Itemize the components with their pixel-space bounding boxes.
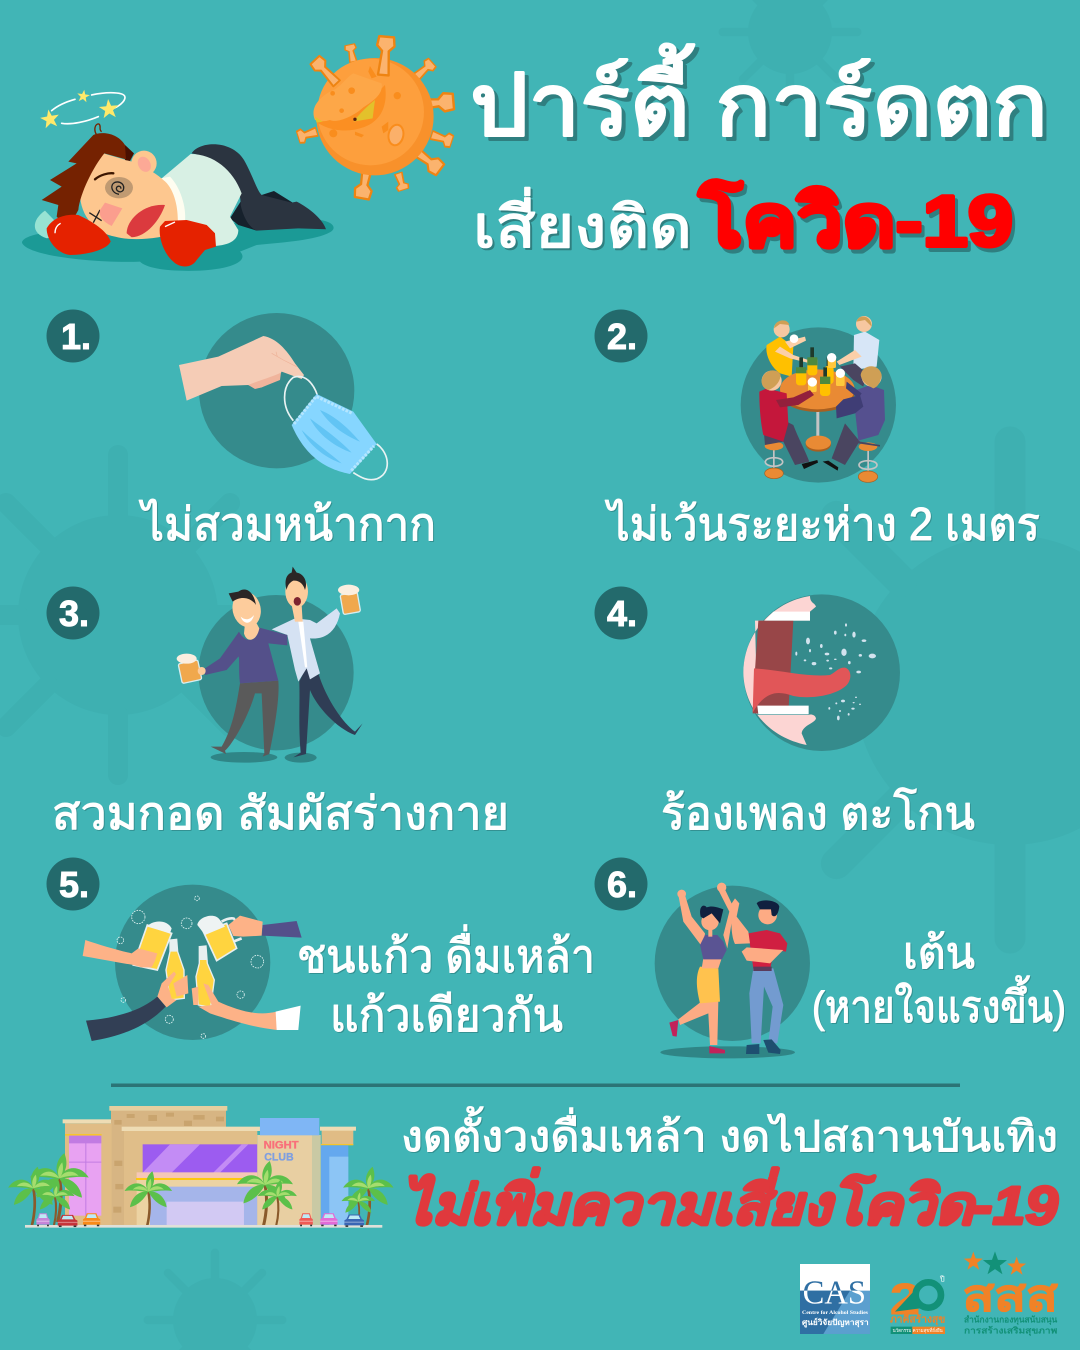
front-right man — [823, 366, 885, 471]
cars — [36, 1213, 364, 1227]
caption 6: เต้น — [903, 929, 975, 978]
head — [80, 153, 178, 239]
arm left — [83, 940, 157, 967]
floor shadow — [22, 220, 334, 271]
number badge 5 — [46, 858, 100, 910]
number badge 1: 1. — [61, 316, 91, 357]
circle and drunk men illustration — [177, 567, 363, 763]
caption 5: ชนแก้ว ดื่มเหล้า — [297, 924, 595, 982]
caption 6 — [812, 929, 1066, 1032]
number badge 4 — [594, 586, 648, 640]
logo: 20 years: ปี — [939, 1275, 945, 1284]
neon sign text: NIGHT — [264, 1140, 299, 1152]
logo: ThaiHealth — [963, 1251, 1058, 1336]
item 3: hugging — [46, 567, 509, 839]
hand bottom right — [192, 983, 277, 1030]
front-left man — [759, 370, 818, 469]
logo: CAS — [800, 1264, 870, 1334]
logos — [800, 1251, 1058, 1336]
beer glass left — [133, 925, 172, 970]
bottles and glasses — [796, 347, 845, 396]
dizzy face — [89, 173, 165, 237]
caption 5 — [297, 924, 595, 1041]
caption 1: ไม่สวมหน้ากาก — [138, 498, 436, 550]
number badge 1 — [46, 310, 100, 362]
item 4: singing and shouting — [594, 586, 975, 839]
orange virus — [296, 36, 454, 200]
stools — [765, 442, 878, 482]
dizzy stars ring — [39, 89, 125, 129]
woman — [669, 883, 734, 1053]
caption 5: แก้วเดียวกัน — [330, 989, 563, 1041]
item 1: no mask — [46, 310, 436, 550]
building blocks — [63, 1106, 356, 1226]
illustration: night club building — [8, 1106, 393, 1228]
item 6: dancing — [594, 858, 1066, 1058]
neon sign text — [264, 1140, 299, 1164]
logo: ThaiHealth: สสส — [963, 1273, 1058, 1321]
logo: ThaiHealth: สำนักงานกองทุนสนับสนุน — [964, 1314, 1058, 1325]
item 2: no distancing — [594, 310, 1040, 550]
back men — [766, 337, 793, 377]
number badge 4: 4. — [607, 593, 637, 634]
hair — [42, 124, 134, 228]
hand top right — [228, 916, 263, 937]
logo: CAS: ศูนย์วิจัยปัญหาสุรา — [802, 1317, 869, 1328]
table — [816, 410, 819, 440]
logo: CAS: CAS — [803, 1274, 866, 1311]
pavement — [25, 1225, 382, 1228]
circle and open mouth illustration — [743, 594, 900, 751]
man — [731, 898, 787, 1054]
trousers and shoes — [192, 144, 326, 231]
logo: CAS: Centre for Alcohol Studies — [802, 1310, 869, 1316]
caption 2: ไม่เว้นระยะห่าง 2 เมตร — [604, 498, 1040, 550]
number badge 6: 6. — [607, 864, 637, 905]
number badge 3 — [46, 586, 100, 640]
number badge 5: 5. — [59, 864, 89, 905]
circle and table illustration — [741, 316, 896, 483]
boxing gloves — [47, 215, 216, 266]
circle and mask illustration — [179, 313, 387, 480]
bottles — [166, 939, 184, 1000]
logo: 20 years: ภาคีสร้างสุข — [890, 1314, 945, 1326]
collar — [161, 177, 185, 222]
caption 4: ร้องเพลง ตะโกน — [661, 787, 975, 839]
closing highlight: ไม่เพิ่มความเสี่ยงโควิด-19 — [402, 1167, 1058, 1236]
circle and toasting hands illustration — [83, 885, 302, 1041]
left man — [177, 589, 287, 757]
main title line 1: ปาร์ตี้ การ์ดตก — [470, 44, 1048, 154]
number badge 3: 3. — [59, 593, 89, 634]
illustration: knocked-out man with boxing gloves — [22, 36, 454, 271]
number badge 6 — [594, 858, 648, 910]
main title highlight: โควิด-19 — [698, 178, 1013, 262]
logo: 20 years: นวัตกรรม ความสุขที่ยั่งยืน — [893, 1327, 943, 1334]
closing message: งดตั้งวงดื่มเหล้า งดไปสถานบันเทิง — [401, 1106, 1058, 1160]
circle and dancing couple illustration — [655, 883, 810, 1058]
hand bottom left — [157, 972, 188, 1007]
palm trees — [8, 1153, 393, 1227]
main title line 2: เสี่ยงติด — [473, 187, 692, 260]
logo: 20 years — [890, 1275, 945, 1334]
number badge 2 — [594, 310, 648, 362]
logo: 20 years: 2 — [890, 1276, 920, 1324]
ear — [131, 151, 157, 176]
item 5: sharing glasses — [46, 858, 595, 1041]
shirt — [162, 154, 242, 246]
neon sign text: CLUB — [264, 1152, 294, 1164]
caption 3: สวมกอด สัมผัสร่างกาย — [52, 787, 509, 839]
mug right — [203, 923, 237, 961]
number badge 2: 2. — [607, 316, 637, 357]
pillow — [35, 211, 70, 238]
right man — [272, 567, 363, 757]
logo: ThaiHealth: การสร้างเสริมสุขภาพ — [964, 1325, 1057, 1336]
